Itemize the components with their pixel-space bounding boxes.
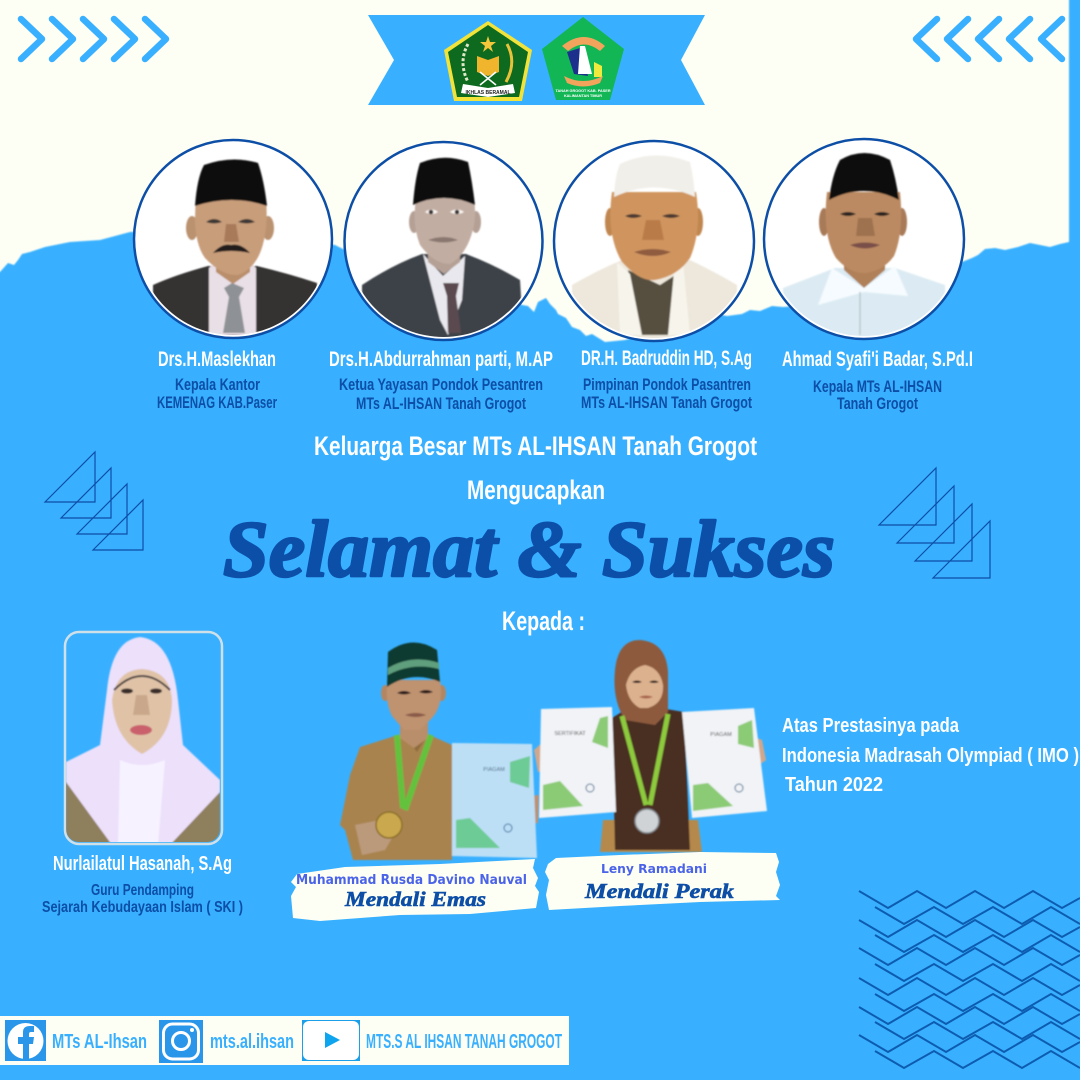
photo: female student with certificates: SERTIFIKAT [554, 731, 586, 737]
icon: instagram [159, 1020, 203, 1063]
caption: Ahmad Syafi'i Badar: Ahmad Syafi'i Badar, S.Pd.I [782, 348, 973, 371]
banner: silver medal [545, 852, 780, 910]
social media bar [0, 1016, 569, 1065]
logo: pondok pesantren emblem: TANAH GROGOT KAB. PASER [555, 89, 611, 93]
logo: Kementerian Agama emblem [444, 21, 532, 101]
torn paper top area [0, 0, 1069, 342]
triangles left [45, 452, 143, 550]
caption: DR.H. Badruddin HD [581, 347, 752, 412]
photo: male student with certificate [340, 642, 539, 860]
banner: gold medal: Muhammad Rusda Davino Nauval [296, 873, 527, 888]
portrait: Drs.H.Abdurrahman parti [344, 142, 542, 345]
caption: Ahmad Syafi'i Badar: Tanah Grogot [837, 394, 918, 413]
photo: female student with certificates [534, 640, 767, 852]
caption: Drs.H.Maslekhan: Kepala Kantor [175, 375, 260, 394]
banner: silver medal: Mendali Perak [584, 879, 735, 903]
caption: Drs.H.Abdurrahman parti: MTs AL-IHSAN Tanah Grogot [356, 394, 526, 413]
caption: teacher: Nurlailatul Hasanah, S.Ag [53, 853, 232, 875]
caption: Drs.H.Abdurrahman parti [329, 348, 553, 413]
caption: DR.H. Badruddin HD: MTs AL-IHSAN Tanah Grogot [581, 393, 752, 412]
caption: teacher: Guru Pendamping [91, 882, 194, 899]
caption: DR.H. Badruddin HD: DR.H. Badruddin HD, S.Ag [581, 347, 752, 370]
caption: Drs.H.Abdurrahman parti: Drs.H.Abdurrahman parti, M.AP [329, 348, 553, 371]
caption: Drs.H.Abdurrahman parti: Ketua Yayasan Pondok Pesantren [339, 375, 543, 394]
photo: male student with certificate: PIAGAM [483, 767, 505, 773]
heading: Kepada: Kepada : [502, 606, 585, 636]
logo: pondok pesantren emblem [542, 17, 624, 100]
label: instagram: mts.al.ihsan [210, 1031, 294, 1053]
caption: DR.H. Badruddin HD: Pimpinan Pondok Pasantren [583, 375, 751, 394]
heading: Mengucapkan: Mengucapkan [467, 475, 605, 505]
caption: Ahmad Syafi'i Badar: Kepala MTs AL-IHSAN [813, 377, 942, 396]
title: Selamat & Sukses: Selamat & Sukses [223, 506, 835, 594]
caption: Ahmad Syafi'i Badar [782, 348, 973, 413]
caption: Drs.H.Maslekhan [157, 348, 277, 412]
logo: Kementerian Agama emblem: IKHLAS BERAMAL [466, 90, 510, 96]
label: youtube: MTS.S AL IHSAN TANAH GROGOT [366, 1031, 562, 1053]
heading: family greeting: Keluarga Besar MTs AL-IHSAN Tanah Grogot [314, 431, 757, 461]
top ribbon with logos [368, 15, 705, 105]
portrait: Drs.H.Maslekhan [134, 140, 332, 345]
caption: Drs.H.Maslekhan: Drs.H.Maslekhan [158, 348, 276, 371]
label: facebook: MTs AL-Ihsan [52, 1031, 147, 1053]
chevrons left [21, 19, 166, 59]
photo: female student with certificates: PIAGAM [710, 732, 732, 738]
icon: youtube [302, 1020, 360, 1061]
banner: silver medal: Leny Ramadani [601, 862, 707, 876]
portrait: DR.H. Badruddin HD [554, 141, 754, 345]
achievement text: Tahun 2022 [785, 774, 883, 796]
logo: pondok pesantren emblem: KALIMANTAN TIMUR [564, 94, 602, 98]
triangles right [879, 468, 990, 578]
banner: gold medal: Mendali Emas [344, 887, 486, 911]
caption: Drs.H.Maslekhan: KEMENAG KAB.Paser [157, 393, 277, 412]
achievement text [782, 715, 1079, 796]
zigzag pattern [859, 891, 1080, 1068]
chevrons right [916, 19, 1062, 59]
caption: teacher: Sejarah Kebudayaan Islam ( SKI ) [42, 899, 243, 916]
caption: teacher [42, 853, 243, 916]
achievement text: Atas Prestasinya pada [782, 715, 960, 737]
banner: gold medal [291, 859, 539, 921]
icon: facebook [5, 1020, 46, 1061]
photo: teacher [65, 632, 222, 845]
portrait: Ahmad Syafi'i Badar [764, 139, 964, 345]
